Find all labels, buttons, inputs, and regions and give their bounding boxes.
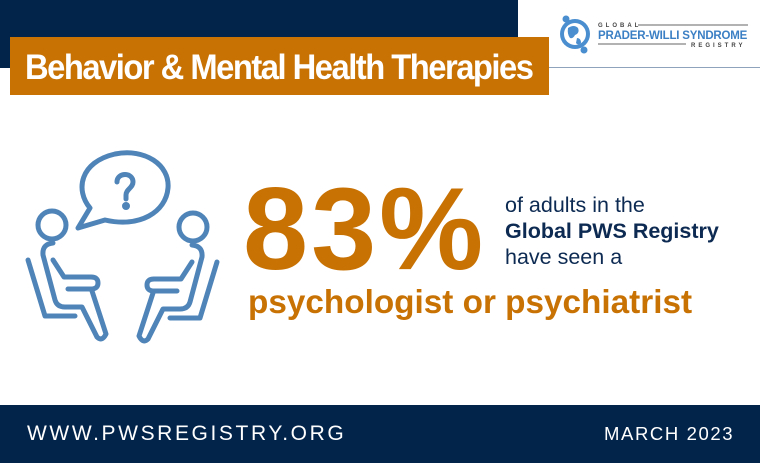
- icon: globe: [560, 16, 590, 54]
- logo text: REGISTRY: [691, 43, 745, 49]
- stat description: Global PWS Registry: [505, 219, 719, 243]
- speech bubble: [78, 153, 168, 228]
- title banner: [10, 37, 549, 95]
- top navy bar: [0, 0, 518, 68]
- website url: WWW.PWSREGISTRY.ORG: [27, 422, 346, 445]
- stat description: [505, 193, 719, 269]
- stat description: of adults in the: [505, 193, 645, 217]
- icon: therapy session: [26, 150, 220, 344]
- logo text: PRADER-WILLI SYNDROME: [598, 30, 748, 42]
- stat description: have seen a: [505, 245, 622, 269]
- right person: [139, 213, 217, 341]
- big stat 83%: 83%: [243, 163, 486, 294]
- stat subject: psychologist or psychiatrist: [248, 284, 692, 321]
- logo: [560, 16, 748, 54]
- footer bar: [0, 405, 760, 463]
- logo text: GLOBAL: [598, 23, 641, 29]
- left person: [28, 211, 106, 339]
- header rule: [518, 67, 760, 68]
- title: Behavior & Mental Health Therapies: [25, 48, 532, 87]
- logo text: [598, 23, 748, 49]
- date: MARCH 2023: [604, 423, 734, 444]
